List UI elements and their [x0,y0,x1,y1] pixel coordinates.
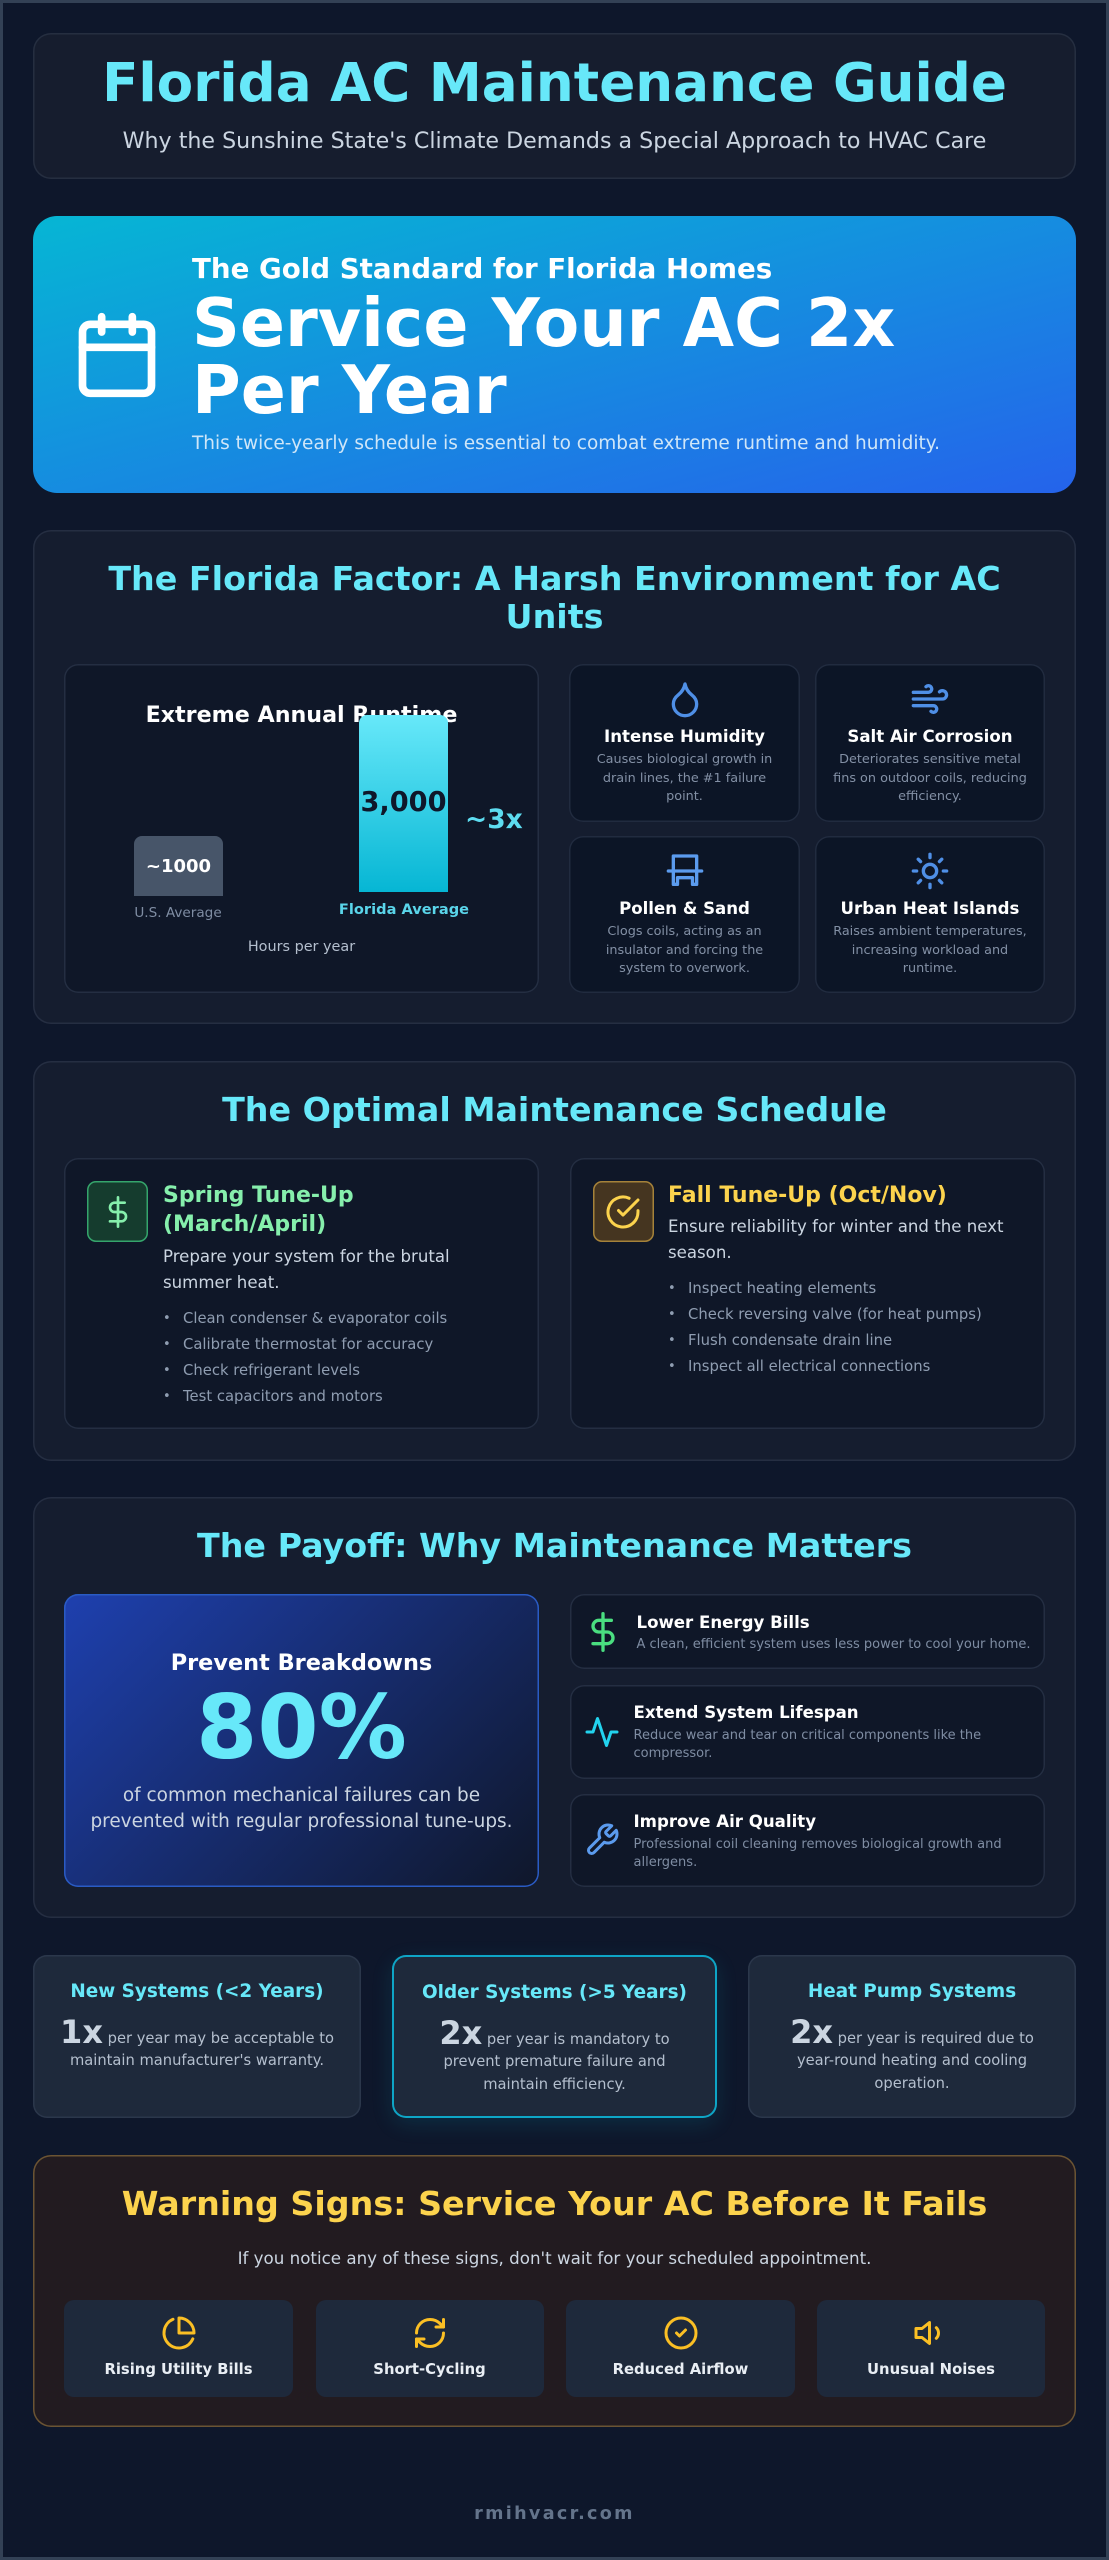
panel: the Florida factor [33,530,1076,1024]
card: heat islands: increasing workload and [852,942,1008,958]
benefit: extend lifespan: Extend System Lifespan [634,1703,859,1722]
card: new systems: maintain manufacturer's warranty. [70,2052,324,2069]
card: new systems: New Systems (<2 Years) [70,1981,324,2002]
card: heat islands: Urban Heat Islands [841,899,1019,918]
icon: circle check [664,2316,698,2350]
card: fall tune-up [570,1158,1045,1429]
card: humidity [569,664,800,822]
spring description [163,1247,450,1292]
icon: droplet [672,682,698,718]
fall checklist [670,1280,982,1375]
bar: Florida average: 3,000 [360,787,446,818]
stat card: prevent breakdowns [64,1594,539,1887]
panel: runtime bar chart [64,664,539,993]
benefit: lower energy bills: Lower Energy Bills [636,1613,810,1632]
label: U.S. average: U.S. Average [134,905,222,921]
benefit: lower energy bills [570,1594,1045,1669]
card: pollen and sand: insulator and forcing the [606,942,763,958]
card: heat pumps: year-round heating and cooling [797,2052,1027,2069]
sign: rising bills: Rising Utility Bills [104,2361,253,2378]
card: heat islands: Raises ambient temperatures, [833,924,1027,939]
card: salt air [815,664,1045,822]
stat number: 80% [196,1676,407,1779]
icon: activity [586,1717,618,1747]
chart title: Extreme Annual Runtime [146,702,457,728]
benefit: air quality: allergens. [634,1855,697,1870]
card: heat pumps [748,1955,1076,2118]
card: salt air: Salt Air Corrosion [847,727,1013,746]
spring description: summer heat. [163,1273,279,1292]
card: humidity: Causes biological growth in [597,752,772,767]
card: older systems: 2x per year is mandatory to [439,2014,670,2052]
fall description: Ensure reliability for winter and the next [668,1217,1004,1236]
sign: short cycling [316,2300,544,2397]
warning description: If you notice any of these signs, don't wait for your scheduled appointment. [238,2248,871,2268]
bar: U.S. average: ~1000 [146,856,211,877]
card: humidity: point. [666,789,703,804]
benefit: air quality: Improve Air Quality [634,1812,816,1831]
heading: The Florida Factor: A Harsh Environment for AC [108,559,1001,598]
benefit: extend lifespan: compressor. [634,1746,712,1761]
card: spring tune-up [64,1158,539,1429]
hero headline: Service Your AC 2x [192,284,895,362]
icon: calendar [78,312,156,398]
spring checklist: Test capacitors and motors [183,1388,383,1405]
subtitle: Why the Sunshine State's Climate Demands a Special Approach to HVAC Care [123,128,986,154]
card: pollen and sand: Pollen & Sand [619,899,750,918]
label: Florida average: Florida Average [339,901,469,918]
spring title: Spring Tune-Up [163,1182,354,1208]
card: pollen and sand: Clogs coils, acting as an [607,924,762,939]
icon: dollar sign [591,1612,615,1652]
header panel [33,33,1076,179]
heading: Units [506,597,603,636]
sign: rising bills [64,2300,293,2397]
benefit: extend lifespan [570,1685,1045,1779]
spring checklist: Calibrate thermostat for accuracy [183,1336,433,1353]
warning heading: Warning Signs: Service Your AC Before It Fails [122,2184,987,2223]
card: new systems [33,1955,361,2118]
card: pollen and sand [569,836,800,993]
icon: refresh [414,2318,446,2348]
multiplier callout: ~3x [465,804,523,835]
spring checklist: Clean condenser & evaporator coils [183,1310,447,1327]
sign: unusual noises: Unusual Noises [867,2361,995,2378]
hero headline [192,284,895,429]
panel: the payoff [33,1497,1076,1918]
stat description: of common mechanical failures can be [123,1785,480,1806]
sign: reduced airflow: Reduced Airflow [613,2361,748,2378]
icon: speaker [914,2321,940,2346]
bar: U.S. average [134,836,223,896]
heading: The Optimal Maintenance Schedule [222,1090,887,1129]
card: salt air: Deteriorates sensitive metal [839,752,1021,767]
icon: sun [912,852,948,890]
fall title: Fall Tune-Up (Oct/Nov) [668,1182,947,1208]
icon: dollar sign [87,1181,148,1242]
hero eyebrow: The Gold Standard for Florida Homes [192,252,772,285]
fall checklist: Inspect heating elements [688,1280,876,1297]
fall checklist: Inspect all electrical connections [688,1358,930,1375]
chart unit: Hours per year [248,939,355,955]
hero description: This twice-yearly schedule is essential to combat extreme runtime and humidity. [192,433,940,454]
icon: filter frame [666,854,704,886]
benefit: lower energy bills: A clean, efficient system uses less power to cool your home. [636,1637,1031,1652]
title: Florida AC Maintenance Guide [102,52,1007,114]
icon: wind [912,684,948,714]
panel: maintenance schedule [33,1061,1076,1461]
stat description: prevented with regular professional tune-ups. [90,1811,513,1832]
card: older systems: maintain efficiency. [483,2076,626,2093]
card: heat pumps: operation. [874,2075,950,2092]
spring title: (March/April) [163,1212,326,1236]
fall checklist: Flush condensate drain line [688,1332,892,1349]
spring checklist [165,1310,447,1405]
fall checklist: Check reversing valve (for heat pumps) [688,1306,982,1323]
stat description [90,1785,513,1832]
card: humidity: Intense Humidity [604,727,765,746]
card: heat pumps: 2x per year is required due to [790,2013,1034,2051]
card: heat islands: runtime. [903,961,957,976]
sign: reduced airflow [566,2300,795,2397]
heading [108,559,1001,636]
fall description: season. [668,1243,732,1262]
card: humidity: drain lines, the #1 failure [603,770,766,786]
card: heat pumps: Heat Pump Systems [808,1981,1016,2002]
heading: The Payoff: Why Maintenance Matters [197,1526,912,1564]
footer: rmihvacr.com [474,2504,635,2524]
icon: pie chart [162,2316,196,2350]
card: older systems: prevent premature failure and [443,2053,666,2070]
hero banner [33,216,1076,493]
icon: wrench [587,1824,618,1855]
benefit: extend lifespan: Reduce wear and tear on critical components like the [634,1728,981,1743]
spring title [163,1182,354,1236]
fall description [668,1217,1004,1262]
card: salt air: efficiency. [898,789,962,804]
sign: short cycling: Short-Cycling [373,2361,486,2378]
hero headline: Per Year [192,351,507,429]
stat title: Prevent Breakdowns [171,1650,432,1676]
card: older systems [392,1955,717,2118]
benefit: air quality: Professional coil cleaning removes biological growth and [634,1837,1002,1852]
card: heat islands [815,836,1045,993]
card: new systems: 1x per year may be acceptable to [60,2013,334,2051]
bar: Florida average [359,715,448,892]
icon: check circle [592,1181,654,1242]
benefit: air quality [570,1794,1045,1887]
spring description: Prepare your system for the brutal [163,1247,450,1266]
card: salt air: fins on outdoor coils, reducing [833,770,1027,786]
panel: warning signs [33,2155,1076,2427]
card: older systems: Older Systems (>5 Years) [422,1982,687,2003]
spring checklist: Check refrigerant levels [183,1362,360,1379]
card: pollen and sand: system to overwork. [619,961,750,976]
sign: unusual noises [817,2300,1045,2397]
